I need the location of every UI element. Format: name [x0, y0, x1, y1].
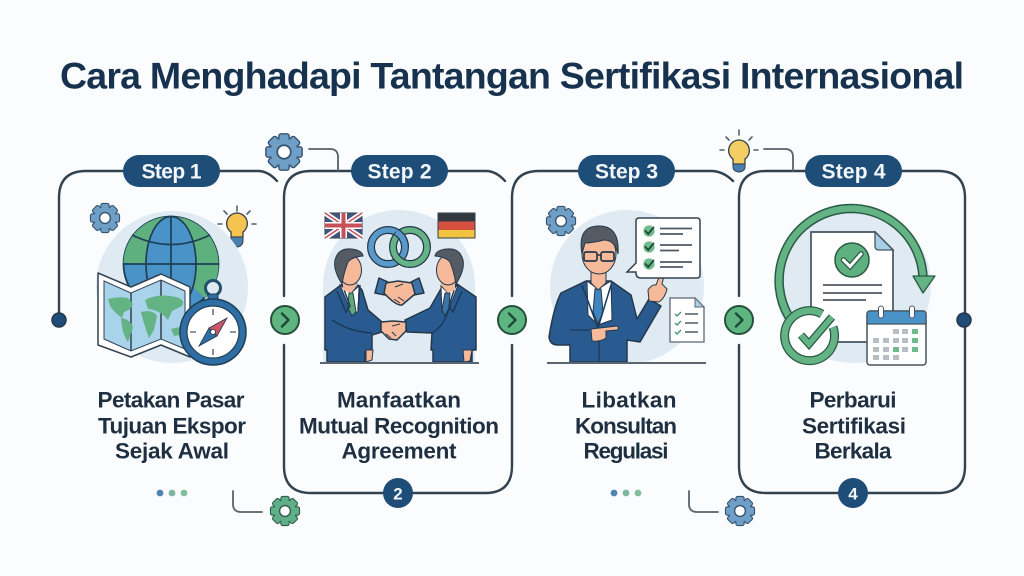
number badge 2	[383, 478, 413, 508]
main handshake	[381, 321, 406, 340]
step 4 badge: Step 4	[822, 160, 886, 184]
figure: consultant body	[549, 226, 667, 362]
text: step 3 label: Libatkan	[582, 388, 676, 412]
text: step 2 label: Agreement	[342, 438, 457, 464]
panel frame 2	[284, 171, 512, 493]
panel: step 2	[266, 134, 512, 508]
icon: linked rings	[371, 230, 427, 264]
compass	[180, 280, 246, 365]
end dot	[957, 313, 971, 327]
step 1 badge	[123, 155, 220, 187]
pagination dots	[611, 490, 641, 496]
pagination dots	[157, 490, 187, 496]
number badge 4	[838, 478, 868, 508]
circular arrow	[779, 209, 935, 317]
illustration: two businessmen handshake	[320, 210, 479, 363]
flag: Germany	[438, 213, 475, 238]
panel: step 4	[720, 130, 971, 508]
illustration: consultant	[547, 210, 706, 364]
icon: gear	[91, 204, 119, 232]
number badge 4: 4	[848, 484, 858, 504]
flag: UK	[325, 213, 362, 238]
text: step 1 label	[98, 388, 246, 464]
icon: blue gear with connector	[689, 491, 754, 525]
figure: right man	[405, 249, 476, 362]
figure: left man	[325, 249, 382, 362]
step 2 badge: Step 2	[368, 160, 432, 184]
text: step 1 label: Petakan Pasar	[98, 388, 245, 412]
panel: step 1	[52, 155, 299, 525]
step 1 badge: Step 1	[142, 160, 202, 184]
panel frame 3	[512, 171, 733, 296]
connector arrow 3	[725, 306, 753, 334]
table line	[547, 362, 706, 364]
text: step 2 label: Manfaatkan	[337, 388, 461, 412]
step 4 badge	[805, 155, 902, 187]
icon: top gear with connector	[266, 134, 338, 171]
text: step 4 label	[802, 388, 906, 464]
connector arrow 2	[498, 306, 526, 334]
text: step 3 label: Konsultan	[575, 414, 677, 438]
icon: bulb with connector	[720, 130, 793, 172]
step 2 badge	[351, 155, 448, 187]
text: step 2 label	[299, 388, 499, 464]
text: step 3 label: Regulasi	[584, 438, 668, 464]
illustration: globe, map and compass	[96, 211, 248, 365]
step 3 badge: Step 3	[595, 160, 658, 184]
text: step 2 label: Mutual Recognition	[299, 414, 499, 438]
map	[98, 273, 190, 357]
icon: gear	[547, 207, 575, 235]
hands	[591, 272, 667, 341]
certificate document	[811, 232, 893, 342]
text: step 1 label: Sejak Awal	[115, 438, 229, 464]
check badge	[783, 311, 837, 365]
title: Cara Menghadapi Tantangan Sertifikasi Internasional	[60, 54, 964, 96]
globe	[124, 216, 219, 312]
icon: green gear with connector	[233, 491, 299, 525]
icon: small handshake	[375, 278, 424, 305]
icon: light bulb	[218, 206, 256, 247]
panel frame 4	[739, 171, 965, 493]
panel: step 3	[498, 155, 754, 525]
document checklist	[670, 298, 704, 342]
text: step 4 label: Berkala	[814, 438, 892, 464]
step 3 badge	[578, 155, 675, 187]
speech bubble checklist	[627, 218, 700, 278]
text: step 4 label: Sertifikasi	[802, 414, 906, 438]
text: step 1 label: Tujuan Ekspor	[98, 414, 246, 438]
number badge 2: 2	[393, 484, 403, 504]
calendar	[867, 306, 926, 365]
panel frame 1	[59, 171, 277, 318]
illustration: renewal cycle	[775, 207, 935, 365]
table line	[320, 362, 479, 364]
connector arrow 1	[271, 306, 299, 334]
text: step 3 label	[575, 388, 677, 464]
start dot	[52, 313, 66, 327]
text: step 4 label: Perbarui	[810, 388, 896, 412]
